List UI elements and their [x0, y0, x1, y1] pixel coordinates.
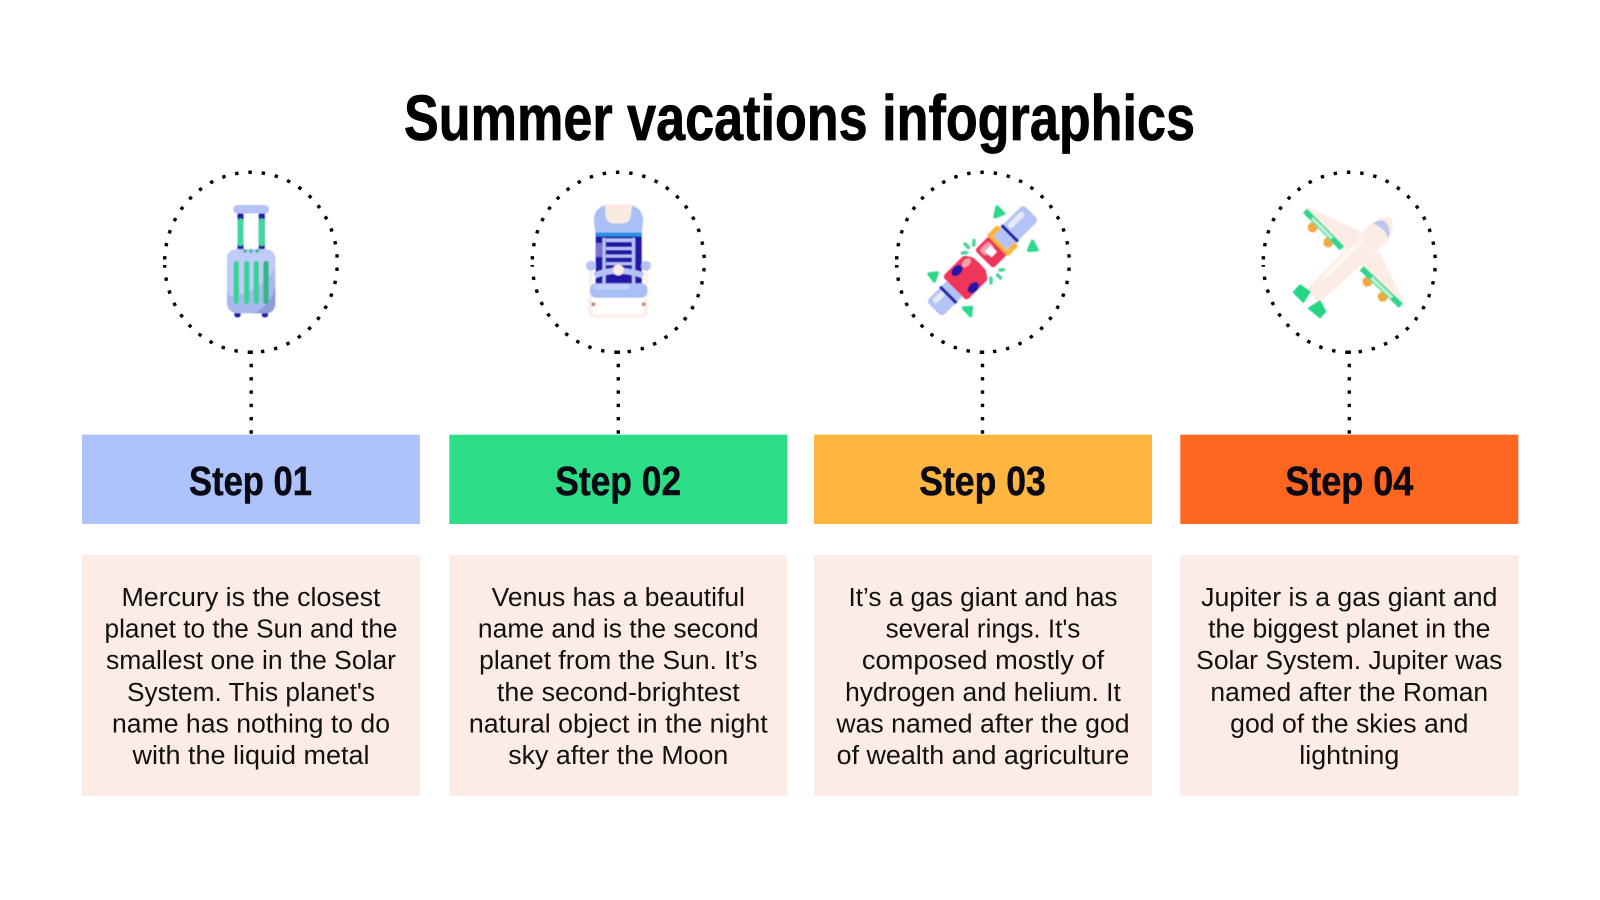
text block: step 01: planet to the Sun and the	[104, 616, 398, 644]
text block: step 02: planet from the Sun. It’s	[479, 647, 757, 675]
panel: step 03	[814, 172, 1152, 796]
text block: step 01: Mercury is the closest	[122, 584, 380, 612]
dotted circle 1	[165, 172, 337, 352]
dotted circle 2	[532, 172, 704, 352]
panel: step 02	[449, 172, 787, 796]
text block: step 02	[449, 555, 787, 796]
text block: step 04: god of the skies and	[1230, 710, 1468, 738]
header bar: step 03: Step 03	[919, 458, 1046, 504]
text block: step 03: of wealth and agriculture	[837, 742, 1129, 770]
text block: step 03: composed mostly of	[862, 647, 1105, 675]
text block: step 01	[82, 555, 420, 796]
icon: airplane	[1293, 207, 1405, 318]
dotted circle 4	[1263, 172, 1435, 352]
text block: step 03: It’s a gas giant and has	[848, 584, 1118, 612]
panel: step 01	[82, 172, 420, 796]
text block: step 02: name and is the second	[478, 616, 759, 644]
title: Summer vacations infographics	[404, 82, 1195, 154]
header bar: step 04	[1180, 435, 1518, 524]
dotted connector 3	[981, 350, 984, 435]
text block: step 04: lightning	[1299, 742, 1399, 770]
header bar: step 04: Step 04	[1285, 458, 1413, 504]
text block: step 04	[1180, 555, 1518, 796]
icon: airplane seat	[586, 204, 651, 316]
text block: step 02: the second-brightest	[497, 679, 740, 707]
icon: suitcase	[227, 205, 275, 317]
text block: step 04: Jupiter is a gas giant and	[1201, 584, 1497, 612]
text block: step 02: Venus has a beautiful	[492, 584, 745, 612]
text block: step 04: the biggest planet in the	[1208, 616, 1490, 644]
text block: step 03	[814, 555, 1152, 796]
text block: step 04: named after the Roman	[1210, 679, 1488, 707]
text block: step 01: name has nothing to do	[112, 710, 390, 738]
dotted connector 4	[1348, 350, 1351, 435]
header bar: step 03	[814, 435, 1152, 524]
text block: step 01: smallest one in the Solar	[106, 647, 397, 675]
text block: step 03: several rings. It's	[886, 616, 1080, 644]
text block: step 03: was named after the god	[835, 710, 1130, 738]
dotted circle 3	[897, 172, 1069, 352]
text block: step 03: hydrogen and helium. It	[845, 679, 1121, 707]
icon: seat belt	[922, 200, 1043, 321]
dotted connector 2	[617, 350, 620, 435]
header bar: step 02: Step 02	[555, 458, 681, 504]
header bar: step 01: Step 01	[189, 458, 312, 504]
text block: step 01: with the liquid metal	[131, 742, 370, 770]
panel: step 04	[1180, 172, 1518, 796]
header bar: step 02	[449, 435, 787, 524]
header bar: step 01	[82, 435, 420, 524]
text block: step 02: natural object in the night	[469, 710, 768, 738]
dotted connector 1	[249, 350, 253, 435]
text block: step 01: System. This planet's	[127, 679, 375, 707]
text block: step 02: sky after the Moon	[508, 742, 728, 770]
text block: step 04: Solar System. Jupiter was	[1196, 647, 1502, 675]
